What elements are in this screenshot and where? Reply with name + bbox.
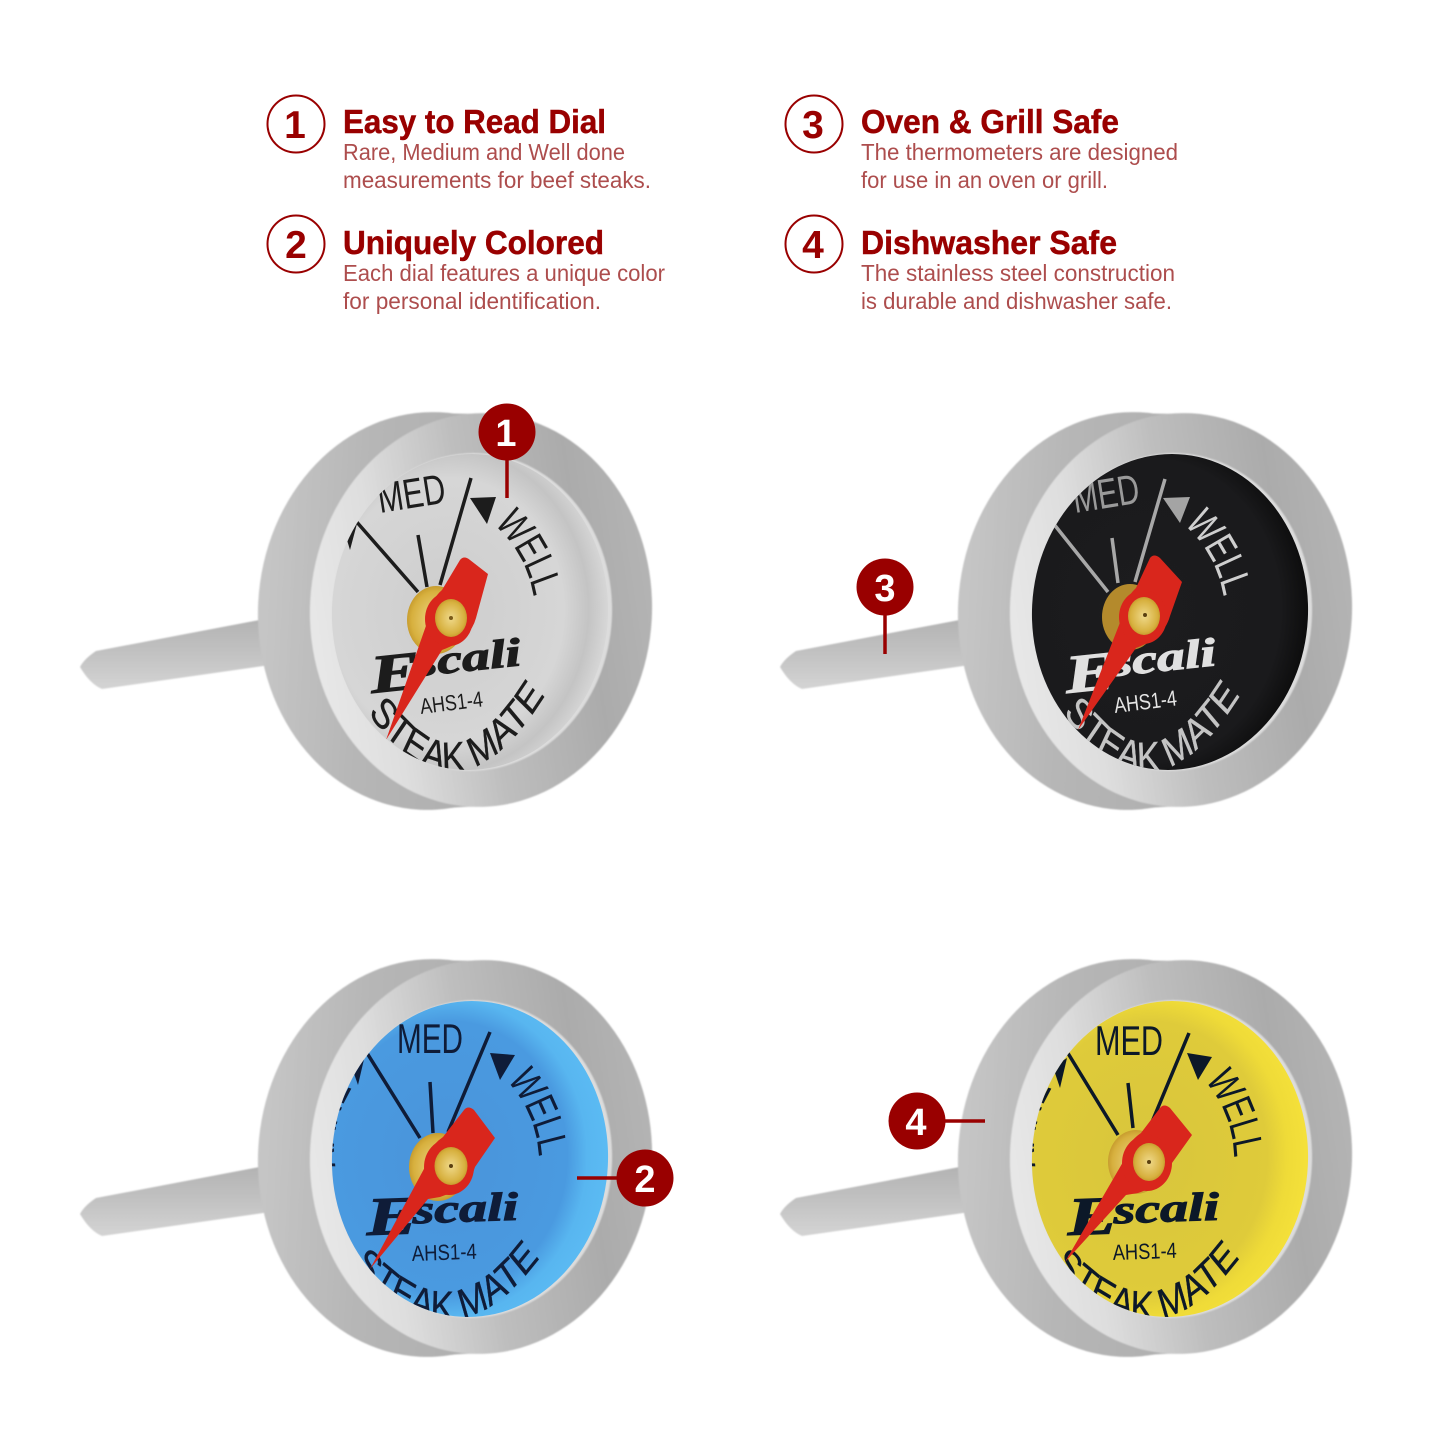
thermometer: blue dial: RARE bbox=[332, 1088, 352, 1166]
callout 1 bbox=[478, 404, 536, 498]
thermometer: yellow dial: AHS1-4 bbox=[1112, 1238, 1177, 1265]
callout 3: 3 bbox=[874, 568, 896, 610]
thermometer: silver dial: RARE bbox=[285, 526, 356, 629]
thermometer: black dial: scali bbox=[1107, 630, 1218, 685]
thermometer: blue dial: WELL bbox=[510, 1065, 566, 1156]
thermometer: black dial: RARE bbox=[980, 526, 1051, 629]
legend item 4: dishwasher safe: The stainless steel construction bbox=[861, 260, 1175, 286]
thermometer: black dial: AHS1-4 bbox=[1113, 685, 1178, 718]
thermometer: yellow dial: MED bbox=[1095, 1017, 1163, 1064]
thermometer: yellow dial: STEAK MATE bbox=[1064, 1239, 1239, 1317]
legend item 4: dishwasher safe bbox=[786, 216, 1175, 314]
legend item 3: oven and grill safe bbox=[786, 96, 1178, 193]
thermometer: silver dial: AHS1-4 bbox=[419, 686, 484, 719]
legend item 3: oven and grill safe: Oven & Grill Safe bbox=[861, 103, 1119, 140]
thermometer: yellow dial: WELL bbox=[1208, 1066, 1262, 1157]
legend item 3: oven and grill safe: The thermometers are designed bbox=[861, 139, 1178, 165]
thermometer: silver dial: E bbox=[366, 640, 423, 705]
callout 1: 1 bbox=[495, 413, 517, 455]
thermometer: black dial bbox=[780, 411, 1353, 811]
legend item 4: dishwasher safe: Dishwasher Safe bbox=[861, 224, 1117, 261]
legend item 2: uniquely colored: Each dial features a unique color bbox=[343, 260, 665, 286]
thermometer: black dial: E bbox=[1061, 640, 1118, 705]
thermometer: silver dial: WELL bbox=[498, 506, 558, 596]
thermometer: yellow dial: scali bbox=[1111, 1184, 1220, 1232]
callout 4: 4 bbox=[905, 1102, 927, 1144]
legend item 2: uniquely colored: 2 bbox=[285, 224, 307, 267]
thermometer: yellow dial: RARE bbox=[1032, 1088, 1052, 1166]
legend item 1: easy to read dial: 1 bbox=[284, 104, 306, 147]
thermometer: silver dial: MED bbox=[374, 465, 449, 522]
thermometer: silver dial: scali bbox=[412, 630, 523, 685]
legend item 1: easy to read dial: Easy to Read Dial bbox=[343, 103, 606, 140]
callout 2: 2 bbox=[634, 1159, 656, 1201]
thermometer: yellow dial bbox=[780, 958, 1353, 1358]
thermometer: blue dial bbox=[80, 958, 653, 1358]
legend item 1: easy to read dial: Rare, Medium and Well done bbox=[343, 139, 625, 165]
legend item 1: easy to read dial bbox=[268, 96, 651, 193]
callout 2 bbox=[577, 1150, 674, 1206]
thermometer: blue dial: E bbox=[364, 1186, 418, 1247]
thermometer: blue dial: STEAK MATE bbox=[364, 1240, 539, 1317]
legend item 4: dishwasher safe: is durable and dishwasher safe. bbox=[861, 288, 1172, 314]
thermometer: yellow dial: E bbox=[1065, 1186, 1119, 1247]
legend item 1: easy to read dial: measurements for beef steaks. bbox=[343, 167, 651, 193]
thermometer: black dial: WELL bbox=[1188, 506, 1248, 596]
thermometer: silver dial bbox=[80, 411, 653, 811]
callout 4 bbox=[888, 1092, 985, 1150]
legend item 2: uniquely colored: Uniquely Colored bbox=[343, 224, 604, 261]
thermometer: blue dial: MED bbox=[397, 1015, 463, 1062]
legend item 4: dishwasher safe: 4 bbox=[802, 224, 824, 267]
legend item 2: uniquely colored: for personal identification. bbox=[343, 288, 601, 314]
legend item 3: oven and grill safe: for use in an oven or grill. bbox=[861, 167, 1108, 193]
thermometer: blue dial: AHS1-4 bbox=[411, 1239, 477, 1266]
thermometer: blue dial: scali bbox=[410, 1184, 519, 1232]
thermometer: black dial: STEAK MATE bbox=[1066, 679, 1240, 770]
thermometer: silver dial: STEAK MATE bbox=[372, 679, 544, 770]
legend item 3: oven and grill safe: 3 bbox=[802, 104, 824, 147]
thermometer: black dial: MED bbox=[1069, 465, 1143, 522]
callout 3 bbox=[856, 558, 914, 654]
legend item 2: uniquely colored bbox=[268, 216, 665, 314]
